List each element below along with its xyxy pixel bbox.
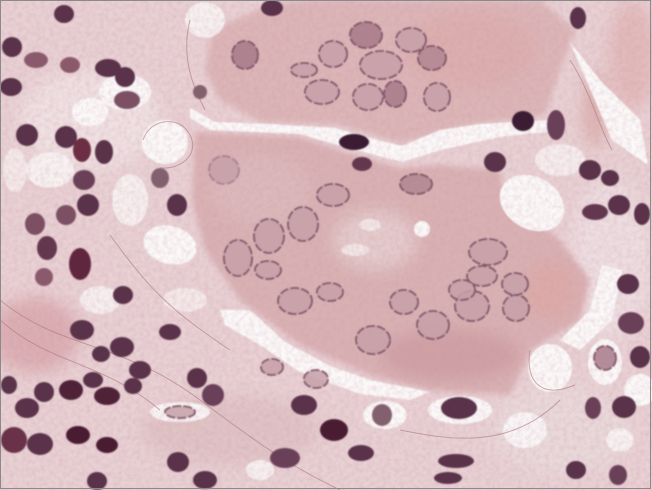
white patches: left tissue <box>99 74 151 110</box>
panel: upper pink cell <box>205 0 575 143</box>
vacuole: nucleus region hole <box>414 221 430 237</box>
cleft: lower left strip <box>220 310 430 400</box>
cleft: right side <box>560 265 622 350</box>
vacuole: left ring <box>142 120 188 164</box>
panel: lower pink cell <box>192 132 590 395</box>
cleft: central horizontal gap <box>190 108 562 162</box>
cleft: upper right <box>570 42 648 165</box>
cytoplasm shading <box>210 12 578 381</box>
vacuole: lower right <box>528 344 572 392</box>
vacuole: left lower <box>139 220 201 270</box>
pale nuclei: inside pink cells <box>165 22 616 418</box>
vacuole: large right <box>490 163 574 243</box>
